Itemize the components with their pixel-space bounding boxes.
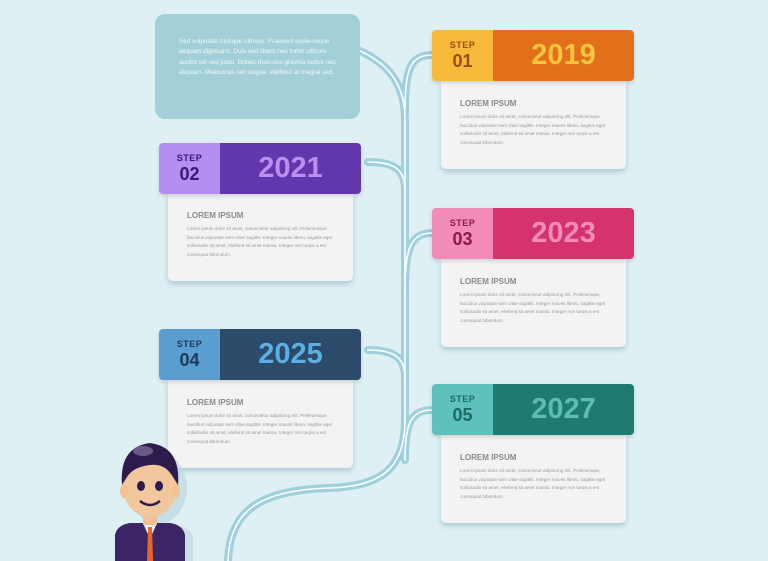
header step 01: 2019: [531, 39, 596, 71]
header step 04: STEP: [177, 339, 202, 349]
header step 03: [432, 208, 634, 259]
card 2 body: LOREM IPSUM: [187, 211, 243, 220]
header step 01: [432, 30, 634, 81]
header step 02: [159, 143, 361, 194]
icon: businessman: [115, 443, 193, 561]
header step 01: 01: [452, 51, 473, 71]
header step 01: STEP: [450, 40, 475, 50]
card 4 body: Lorem ipsum dolor sit amet, consectetur adipiscing elit. Pellentesque faucibus vulputate sem vitae sagittis. Integer mauris libero, sagittis eget sollicitudin sit amet, eleifend sit amet massa. Integer non turpis a est consequat bibendum.: [187, 413, 332, 444]
card 5 body: Lorem ipsum dolor sit amet, consectetur adipiscing elit. Pellentesque faucibus vulputate sem vitae sagittis. Integer mauris libero, sagittis eget sollicitudin sit amet, eleifend sit amet massa. Integer non turpis a est consequat bibendum.: [460, 468, 605, 499]
header step 04: [159, 329, 361, 380]
header step 03: 2023: [531, 217, 596, 249]
card 4 body: [168, 380, 353, 468]
intro text box: [155, 14, 360, 119]
card 5 body: [441, 435, 626, 523]
card 2 body: [168, 193, 353, 281]
card 5 body: LOREM IPSUM: [460, 453, 516, 462]
header step 03: STEP: [450, 218, 475, 228]
header step 02: STEP: [177, 153, 202, 163]
card 2 body: Lorem ipsum dolor sit amet, consectetur adipiscing elit. Pellentesque faucibus vulputate sem vitae sagittis. Integer mauris libero, sagittis eget sollicitudin sit amet, eleifend sit amet massa. Integer non turpis a est consequat bibendum.: [187, 226, 332, 257]
header step 05: 2027: [531, 393, 596, 425]
card 1 body: [441, 81, 626, 169]
card 3 body: Lorem ipsum dolor sit amet, consectetur adipiscing elit. Pellentesque faucibus vulputate sem vitae sagittis. Integer mauris libero, sagittis eget sollicitudin sit amet, eleifend sit amet massa. Integer non turpis a est consequat bibendum.: [460, 292, 605, 323]
header step 05: 05: [452, 405, 473, 425]
intro text box: Sed vulputate tristique ultrices. Praesent scele-risque aliquam dignissim. Duis sed libero nec tortor ultrices auctor vel sed justo. Donec rhon-cus gravida lectus nec aliquam. Maecenas nec augue, eleifend at magna sed.: [179, 38, 336, 76]
header step 05: [432, 384, 634, 435]
header step 02: 02: [179, 164, 200, 184]
header step 03: 03: [452, 229, 473, 249]
card 1 body: Lorem ipsum dolor sit amet, consectetur adipiscing elit. Pellentesque faucibus vulputate sem vitae sagittis. Integer mauris libero, sagittis eget sollicitudin sit amet, eleifend sit amet massa. Integer non turpis a est consequat bibendum.: [460, 114, 605, 145]
card 4 body: LOREM IPSUM: [187, 398, 243, 407]
header step 04: 04: [179, 350, 200, 370]
card 3 body: [441, 259, 626, 347]
header step 05: STEP: [450, 394, 475, 404]
header step 02: 2021: [258, 152, 323, 184]
card 3 body: LOREM IPSUM: [460, 277, 516, 286]
card 1 body: LOREM IPSUM: [460, 99, 516, 108]
header step 04: 2025: [258, 338, 323, 370]
